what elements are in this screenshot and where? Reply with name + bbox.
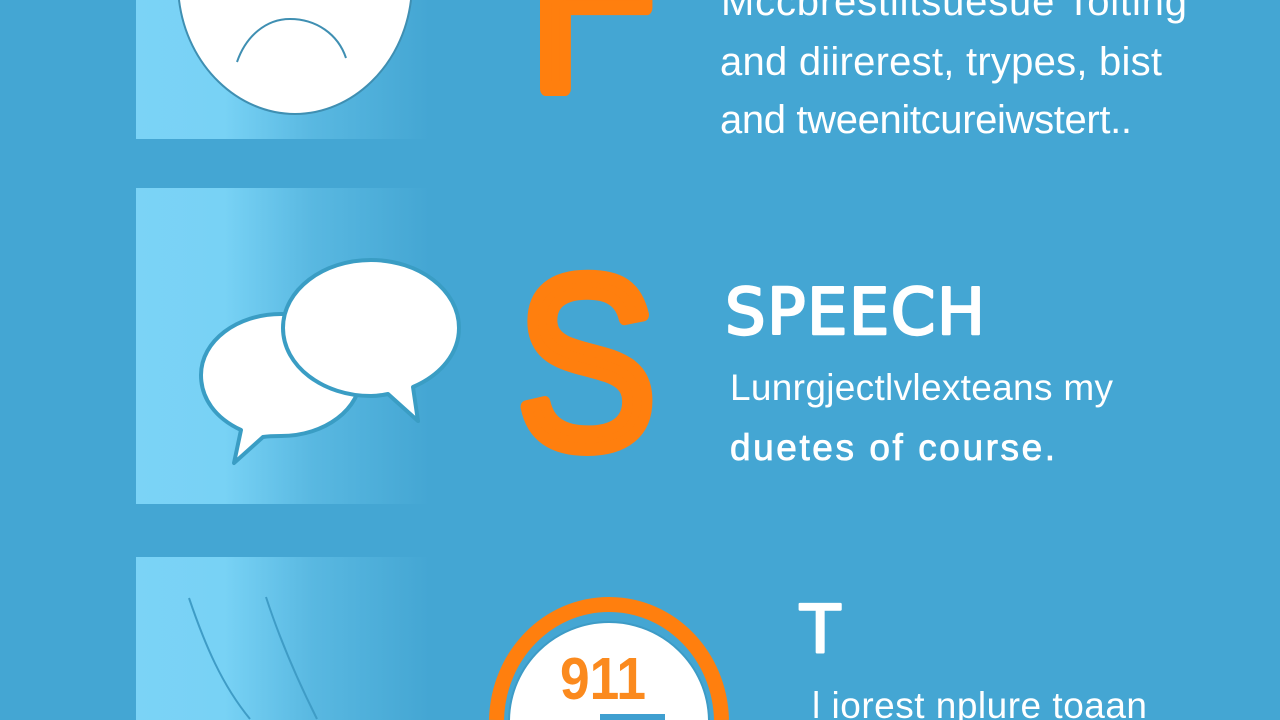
- speech description text: duetes of course.: [730, 427, 1055, 468]
- letter T heading: T: [799, 591, 841, 668]
- speech heading: SPEECH: [725, 276, 985, 350]
- speech description text: Lunrgjectlvlexteans my: [730, 367, 1114, 408]
- face description text: and tweenitcureiwstert..: [720, 98, 1132, 142]
- panel: time row: [136, 557, 1147, 720]
- icon: speech bubbles: [201, 260, 459, 463]
- speech card background: [136, 188, 430, 504]
- panel: face row: [136, 0, 1187, 150]
- icon: 911 phone dial: [496, 604, 722, 720]
- time card background: [136, 557, 430, 720]
- face description text: and diirerest, trypes, bist: [720, 40, 1162, 84]
- face card background: [136, 0, 430, 139]
- speech description text: [730, 367, 1114, 468]
- panel: speech row: [136, 188, 1114, 504]
- face description text: [720, 0, 1187, 142]
- icon: curved lines: [189, 597, 317, 719]
- icon: drooping face: [179, 0, 411, 114]
- letter S: S: [517, 226, 657, 500]
- phone screen: [600, 714, 665, 720]
- 911 number: 911: [560, 646, 646, 712]
